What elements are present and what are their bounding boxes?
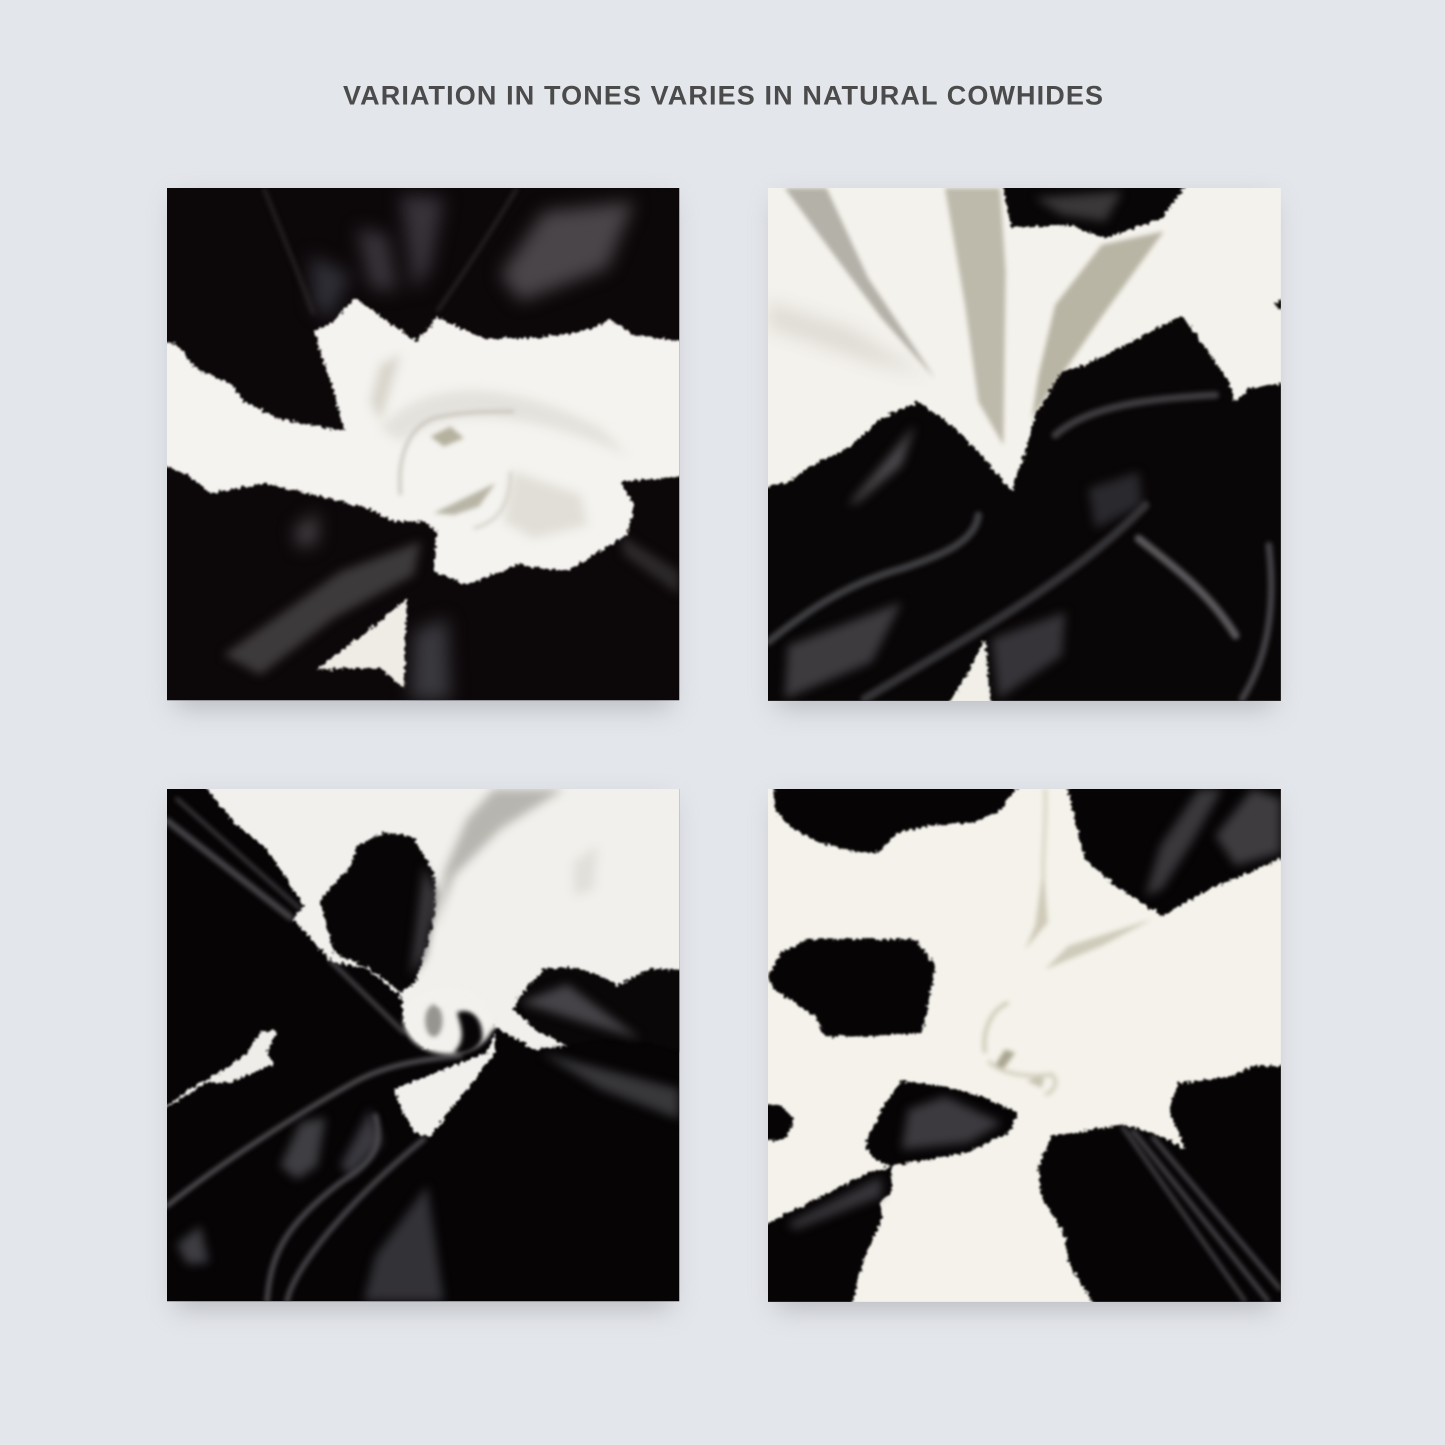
panel: cowhide photo, top right xyxy=(755,175,1296,716)
panel: cowhide photo, bottom right xyxy=(755,776,1296,1317)
icon: central swirl xyxy=(400,411,514,528)
panel: cowhide photo, top left xyxy=(154,185,694,708)
title: VARIATION IN TONES VARIES IN NATURAL COWHIDES xyxy=(343,80,1103,110)
icon: central swirl xyxy=(404,987,494,1054)
panel: cowhide photo, bottom left xyxy=(154,776,694,1309)
